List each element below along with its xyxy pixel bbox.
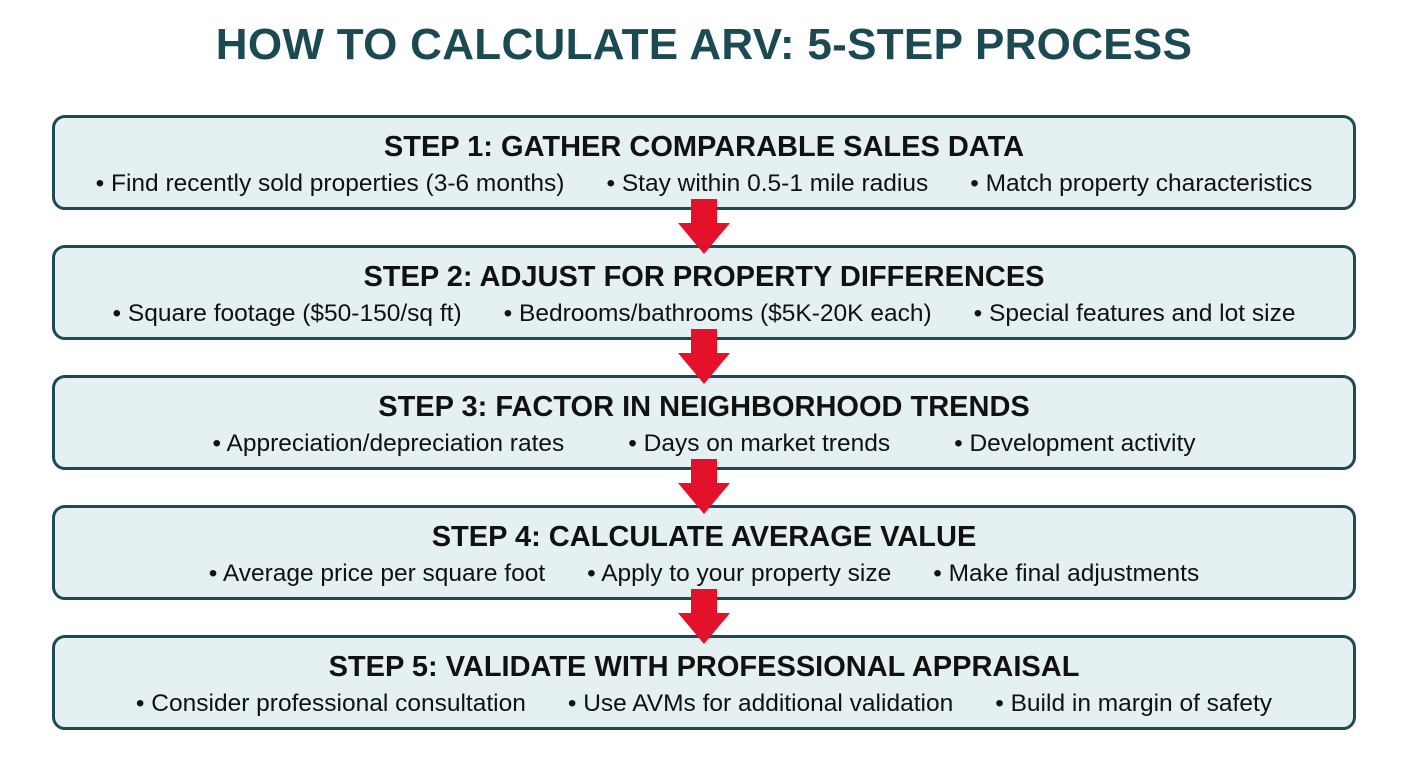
panel: step 1 <box>52 115 1356 210</box>
bullets: step 3: • Appreciation/depreciation rates • Days on market trends • Development activity <box>212 430 1196 457</box>
bullets: step 4: • Average price per square foot • Apply to your property size • Make final adjustments <box>209 560 1199 587</box>
arrow 1 <box>678 199 730 254</box>
arrow 2 <box>678 329 730 384</box>
arrow 4 <box>678 589 730 644</box>
heading: step 5: STEP 5: VALIDATE WITH PROFESSIONAL APPRAISAL <box>329 651 1079 683</box>
heading: step 2: STEP 2: ADJUST FOR PROPERTY DIFFERENCES <box>363 261 1045 293</box>
bullets: step 1: • Find recently sold properties (3-6 months) • Stay within 0.5-1 mile radius • Match property characteristics <box>96 170 1312 197</box>
heading: step 4: STEP 4: CALCULATE AVERAGE VALUE <box>432 521 976 553</box>
panel: step 2 <box>52 245 1356 340</box>
arrow 3 <box>678 459 730 514</box>
panel: step 4 <box>52 505 1356 600</box>
heading: step 1: STEP 1: GATHER COMPARABLE SALES DATA <box>384 131 1024 163</box>
heading: step 3: STEP 3: FACTOR IN NEIGHBORHOOD TRENDS <box>378 391 1030 423</box>
bullets: step 2: • Square footage ($50-150/sq ft) • Bedrooms/bathrooms ($5K-20K each) • Special features and lot size <box>113 300 1295 327</box>
bullets: step 5: • Consider professional consultation • Use AVMs for additional validation • Build in margin of safety <box>136 690 1272 717</box>
title: HOW TO CALCULATE ARV: 5-STEP PROCESS <box>216 20 1192 69</box>
panel: step 5 <box>52 635 1356 730</box>
panel: step 3 <box>52 375 1356 470</box>
